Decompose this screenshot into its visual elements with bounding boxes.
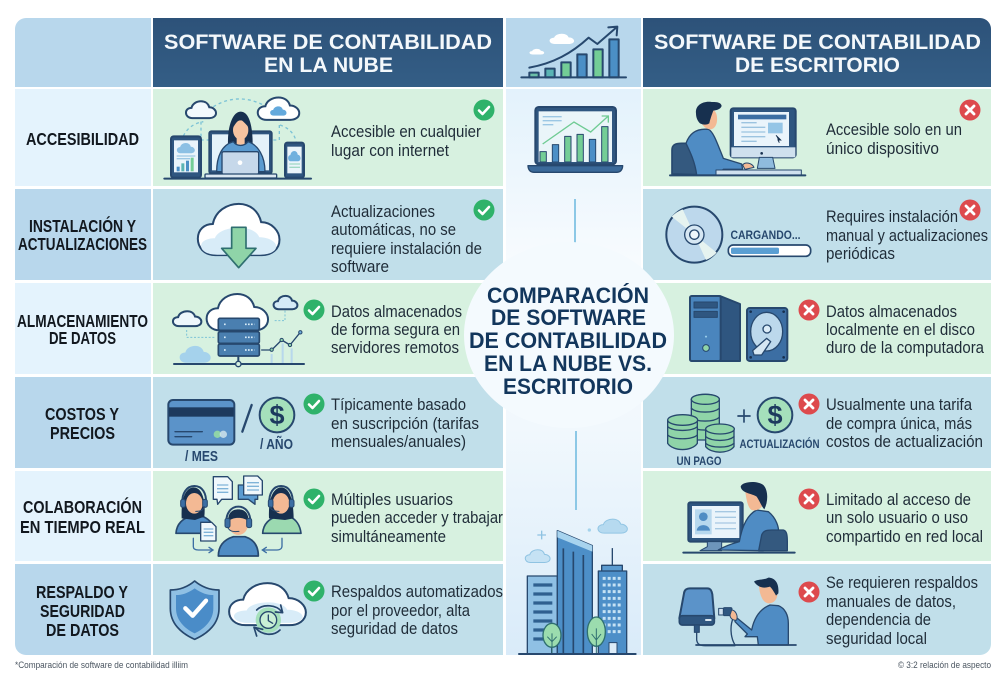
icon: cross (960, 100, 980, 120)
footnote right: © 3:2 relación de aspecto (898, 660, 991, 671)
text block: manuales de datos, (826, 592, 956, 611)
icon: cloud download (198, 204, 279, 268)
icon: coins plus update (668, 394, 820, 468)
text block: Accesible solo en un (826, 120, 962, 139)
panel: cloud pricing (153, 377, 503, 468)
text block: Limitado al acceso de (826, 490, 971, 509)
row label (15, 471, 151, 561)
text block: en suscripción (tarifas (331, 414, 479, 433)
icon: office buildings (519, 519, 636, 654)
icon: man at desktop computer (670, 102, 805, 175)
text block: mensuales/anuales) (331, 432, 466, 451)
icon: coins plus update: $ (767, 400, 783, 430)
text block (826, 207, 988, 263)
text block (331, 395, 479, 451)
row label: COSTOS Y (45, 404, 119, 424)
row: costos (15, 377, 991, 468)
divider line lower (575, 431, 577, 510)
icon: check (304, 394, 324, 414)
text block: pueden acceder y trabajar (331, 508, 503, 527)
panel: desktop backup (643, 564, 991, 655)
panel: desktop collaboration (643, 471, 991, 561)
row label: INSTALACIÓN Y (29, 215, 136, 236)
header: cloud software (153, 18, 503, 87)
header: desktop software: SOFTWARE DE CONTABILIDAD (654, 30, 981, 54)
row: respaldo (15, 564, 991, 655)
center title badge: ESCRITORIO (503, 374, 633, 399)
text block: Datos almacenados (826, 302, 957, 321)
row label: SEGURIDAD (40, 601, 125, 621)
panel: desktop pricing (643, 377, 991, 468)
text block: servidores remotos (331, 338, 459, 357)
panel: desktop accessibility (643, 89, 991, 186)
icon: cross (798, 300, 820, 320)
text block: por el proveedor, alta (331, 601, 470, 620)
text block: de compra única, más (826, 414, 972, 433)
header: cloud software: SOFTWARE DE CONTABILIDAD (164, 30, 492, 54)
text block (331, 582, 503, 638)
icon: check (304, 300, 324, 320)
row label: RESPALDO Y (36, 582, 128, 602)
row: almacenamiento (15, 283, 991, 374)
icon: cross (798, 394, 820, 414)
text block (332, 305, 462, 353)
text block: Se requieren respaldos (826, 573, 978, 592)
text block: de forma segura en (331, 320, 460, 339)
icon: cross (960, 200, 980, 220)
row label (15, 564, 151, 655)
center title badge: COMPARACIÓN (487, 283, 649, 308)
divider line upper (574, 199, 576, 242)
row label: COLABORACIÓN (23, 496, 142, 517)
text block: simultáneamente (331, 527, 446, 546)
text block: Datos almacenados (331, 302, 462, 321)
center title badge: DE CONTABILIDAD (469, 328, 667, 353)
icon: cross (798, 582, 820, 602)
icon: disc and loading bar: CARGANDO... (730, 228, 800, 242)
row label: PRECIOS (50, 423, 115, 443)
text block: seguridad de datos (331, 619, 458, 638)
row label: ACTUALIZACIONES (18, 234, 147, 254)
panel: cloud accessibility (153, 89, 503, 186)
icon: credit card and dollar: / MES (185, 449, 218, 465)
text block: Actualizaciones (331, 202, 435, 221)
row: colaboración (15, 471, 991, 561)
icon: credit card and dollar: $ (269, 400, 285, 430)
icon: coins plus update: ACTUALIZACIÓN (740, 436, 820, 451)
text block: costos de actualización (826, 432, 983, 451)
panel: cloud collaboration (153, 471, 503, 561)
icon: check (474, 100, 494, 120)
footnote left: *Comparación de software de contabilidad illiim (15, 660, 188, 671)
header row (15, 18, 991, 87)
header: desktop software (643, 18, 991, 87)
icon: single user at computer (683, 482, 795, 553)
row label: DE DATOS (46, 620, 119, 640)
text block: lugar con internet (331, 141, 449, 160)
row label (15, 89, 151, 186)
text block: Usualmente una tarifa (826, 395, 972, 414)
panel: desktop installation (643, 189, 991, 280)
text block: Respaldos automatizados (331, 582, 503, 601)
text block: único dispositivo (826, 139, 939, 158)
text block: Requires instalación (826, 207, 958, 226)
icon: cross (798, 488, 820, 510)
header: cloud software: EN LA NUBE (264, 53, 393, 77)
row label: ALMACENAMIENTO (17, 311, 148, 331)
header: desktop software: DE ESCRITORIO (735, 53, 900, 77)
text block: requiere instalación de (331, 239, 482, 258)
text block: seguridad local (826, 629, 927, 648)
text block: duro de la computadora (826, 338, 984, 357)
row label: EN TIEMPO REAL (20, 517, 145, 537)
text block: un solo usuario o uso (826, 508, 968, 527)
text block: periódicas (826, 244, 895, 263)
text block (331, 122, 481, 160)
text block: dependencia de (826, 610, 931, 629)
icon: check (304, 488, 324, 510)
center title badge: EN LA NUBE VS. (484, 351, 652, 376)
icon: three users with headsets and documents (176, 476, 301, 556)
panel: local storage (643, 283, 991, 374)
row label (15, 377, 151, 468)
text block (826, 120, 962, 158)
text block (826, 573, 978, 648)
text block: automáticas, no se (331, 220, 456, 239)
row label (15, 283, 151, 374)
icon: credit card and dollar: / AÑO (260, 435, 293, 453)
row: instalación (15, 189, 991, 280)
text block: compartido en red local (826, 527, 983, 546)
icon: laptop with chart (528, 107, 623, 172)
icon: credit card and dollar (168, 398, 294, 465)
header corner cell (15, 18, 151, 87)
icon: shield and cloud backup (170, 581, 306, 639)
panel: cloud storage (153, 283, 503, 374)
icon: cloud server (173, 294, 304, 367)
text block (331, 490, 503, 546)
text block: Típicamente basado (331, 395, 466, 414)
center title badge (464, 242, 674, 428)
icon: man plugging external drive (679, 578, 796, 646)
center title badge: DE SOFTWARE (491, 305, 646, 330)
icon: coins plus update: UN PAGO (676, 454, 722, 468)
icon: disc and loading bar (666, 207, 811, 263)
icon: check (474, 200, 494, 220)
row label: ACCESIBILIDAD (26, 129, 139, 149)
text block: localmente en el disco (826, 320, 975, 339)
panel: cloud installation (153, 189, 503, 280)
icon: tower and hard drive (690, 296, 787, 361)
text block: Múltiples usuarios (331, 490, 453, 509)
text block (826, 490, 983, 546)
text block (826, 395, 983, 451)
text block (826, 302, 984, 357)
text block: software (331, 257, 389, 276)
text block (331, 202, 482, 276)
panel: cloud backup (153, 564, 503, 655)
text block: Accesible en cualquier (331, 122, 481, 141)
header center cell with growth chart icon (506, 18, 641, 87)
icon: check (304, 580, 324, 602)
icon: woman with devices and clouds (164, 97, 311, 179)
row label (15, 189, 151, 280)
row: accesibilidad (15, 89, 991, 186)
center column (506, 89, 641, 655)
row label: DE DATOS (49, 328, 116, 348)
